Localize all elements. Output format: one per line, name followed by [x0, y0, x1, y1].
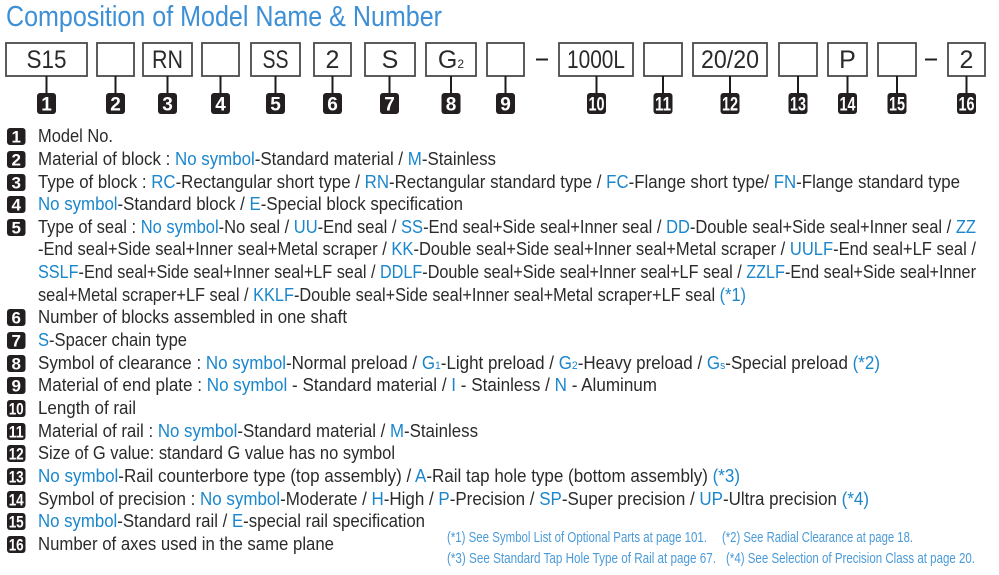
- code box 4: blank: 4: [215, 94, 226, 116]
- code box 8: G2: [426, 43, 476, 116]
- legend item 1: Model No.: [38, 126, 113, 146]
- legend item 14: Symbol of precision : No symbol-Moderate / H-High / P-Precision / SP-Super precision / UP-Ultra precision (*4): [38, 489, 869, 509]
- legend item 1: [7, 126, 113, 146]
- code box 3: RN: 3: [162, 94, 173, 116]
- code box 8: G2: G2: [438, 46, 464, 74]
- code box 2: blank: [97, 43, 134, 116]
- footnotes: (*1) See Symbol List of Optional Parts at page 101.: [447, 529, 707, 546]
- legend item 5: -End seal+Side seal+Inner seal+Metal scraper / KK-Double seal+Side seal+Inner seal+Metal scraper / UULF-End seal+LF seal /: [38, 239, 976, 259]
- code box 3: RN: RN: [152, 46, 183, 74]
- code box 6: 2: [314, 43, 351, 116]
- code box 7: S: S: [382, 46, 398, 74]
- legend item 5: Type of seal : No symbol-No seal / UU-End seal / SS-End seal+Side seal+Inner seal / DD-Double seal+Side seal+Inner seal / ZZ: [38, 217, 976, 237]
- legend item 2: Material of block : No symbol-Standard material / M-Stainless: [38, 149, 496, 169]
- code box 4: blank: [202, 43, 239, 116]
- legend list: [7, 126, 976, 554]
- legend item 2: 2: [11, 150, 21, 170]
- code box 12: 20/20: 20/20: [701, 46, 759, 74]
- code box 12: 20/20: [693, 43, 767, 116]
- legend item 15: No symbol-Standard rail / E-special rail specification: [38, 511, 425, 531]
- legend item 11: Material of rail : No symbol-Standard material / M-Stainless: [38, 421, 478, 441]
- code box 3: RN: [143, 43, 192, 116]
- code box 14: P: P: [839, 46, 856, 74]
- legend item 9: Material of end plate : No symbol - Standard material / I - Stainless / N - Aluminum: [38, 375, 657, 395]
- code box 16: 2: [948, 43, 985, 116]
- legend item 13: No symbol-Rail counterbore type (top assembly) / A-Rail tap hole type (bottom assembly) (*3): [38, 466, 740, 486]
- legend item 5: [7, 217, 976, 305]
- code box 14: P: [828, 43, 867, 116]
- legend item 5: SSLF-End seal+Side seal+Inner seal+LF seal / DDLF-Double seal+Side seal+Inner seal+LF seal / ZZLF-End seal+Side seal+Inner: [38, 262, 976, 282]
- code box 11: blank: [644, 43, 682, 116]
- code box 11: blank: 11: [655, 94, 671, 116]
- code box 12: 20/20: 12: [722, 94, 738, 116]
- code box 2: blank: 2: [110, 94, 121, 116]
- code box 10: 1000L: 10: [588, 94, 604, 116]
- code box 16: 2: 2: [960, 46, 973, 74]
- footnotes: [447, 529, 975, 567]
- legend item 7: 7: [11, 332, 21, 350]
- title: Composition of Model Name & Number: [6, 1, 442, 33]
- model code diagram: [6, 43, 985, 116]
- code box 9: blank: 9: [500, 94, 511, 116]
- code box 13: blank: 13: [790, 94, 806, 116]
- legend item 3: Type of block : RC-Rectangular short type / RN-Rectangular standard type / FC-Flange short type/ FN-Flange standard type: [38, 172, 960, 192]
- legend item 16: Number of axes used in the same plane: [38, 534, 334, 554]
- code box 5: SS: 5: [270, 94, 281, 116]
- legend item 5: 5: [11, 218, 21, 238]
- legend item 12: Size of G value: standard G value has no symbol: [38, 443, 395, 463]
- footnotes: (*3) See Standard Tap Hole Type of Rail at page 67.: [447, 550, 716, 567]
- legend item 4: No symbol-Standard block / E-Special block specification: [38, 194, 463, 214]
- legend item 6: 6: [11, 308, 21, 328]
- legend item 7: S-Spacer chain type: [38, 330, 187, 350]
- code box 16: 2: 16: [958, 94, 974, 116]
- legend item 8: 8: [11, 354, 21, 374]
- code box 5: SS: [251, 43, 300, 116]
- legend item 12: 12: [9, 444, 24, 464]
- footnotes: (*2) See Radial Clearance at page 18.: [722, 529, 913, 546]
- code box 1: S15: [6, 43, 87, 116]
- legend item 5: seal+Metal scraper+LF seal / KKLF-Double seal+Side seal+Inner seal+Metal scraper+LF seal (*1): [38, 285, 746, 305]
- legend item 9: 9: [11, 376, 21, 396]
- legend item 10: Length of rail: [38, 398, 136, 418]
- legend item 16: 16: [9, 536, 24, 554]
- code box 8: G2: 8: [446, 94, 456, 116]
- legend item 3: 3: [11, 174, 21, 192]
- code box 1: S15: 1: [41, 94, 52, 116]
- dash: [925, 58, 937, 60]
- legend item 15: 15: [9, 512, 24, 532]
- legend item 10: 10: [9, 400, 24, 418]
- code box 7: S: [365, 43, 415, 116]
- code box 15: blank: 15: [889, 94, 905, 116]
- code box 9: blank: [487, 43, 524, 116]
- code box 10: 1000L: [559, 43, 633, 116]
- legend item 6: Number of blocks assembled in one shaft: [38, 307, 347, 327]
- code box 1: S15: S15: [26, 46, 66, 74]
- legend item 4: 4: [11, 196, 21, 214]
- legend item 14: 14: [9, 490, 24, 510]
- legend item 13: 13: [9, 468, 24, 486]
- code box 10: 1000L: 1000L: [567, 46, 625, 74]
- code box 5: SS: SS: [262, 46, 288, 74]
- code box 7: S: 7: [384, 94, 395, 116]
- code box 15: blank: [878, 43, 916, 116]
- legend item 1: 1: [11, 128, 21, 146]
- legend item 11: 11: [9, 422, 24, 442]
- code box 6: 2: 6: [327, 94, 338, 116]
- code box 13: blank: [779, 43, 817, 116]
- code box 14: P: 14: [840, 94, 856, 116]
- legend item 8: Symbol of clearance : No symbol-Normal preload / G1-Light preload / G2-Heavy preload / Gs-Special preload (*2): [38, 353, 880, 373]
- code box 6: 2: 2: [326, 46, 339, 74]
- dash: [536, 58, 548, 60]
